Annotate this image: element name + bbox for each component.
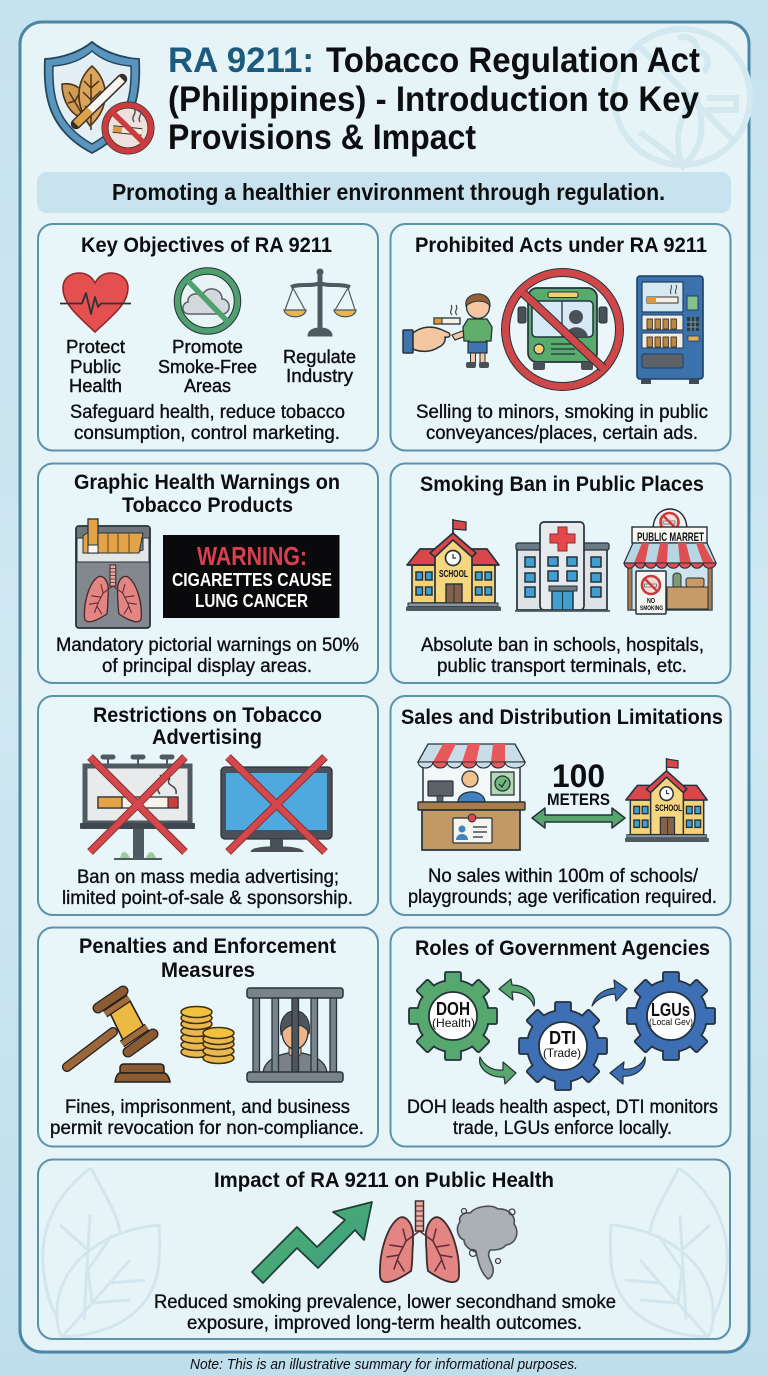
text: ban summary — [421, 635, 704, 677]
icon: smoke cloud — [457, 1206, 517, 1279]
heading: graphic warnings: Tobacco Products — [122, 493, 293, 517]
label: promote smoke-free areas: Smoke-Free — [158, 356, 257, 377]
label: regulate industry — [283, 346, 356, 386]
icon: school — [406, 519, 501, 611]
icon: hand offering cigarette to child — [403, 294, 492, 368]
text: objectives summary — [70, 402, 345, 444]
arrows: agency cycle — [480, 979, 645, 1084]
title — [168, 40, 700, 157]
text: advertising summary: limited point-of-sale & sponsorship. — [62, 888, 353, 909]
icon: public market: NO — [647, 598, 655, 605]
watermark: left leaves — [43, 1168, 160, 1337]
icon: prohibited bus — [506, 272, 620, 386]
text: prohibited summary: Selling to minors, smoking in public — [416, 402, 708, 423]
panel: prohibited acts — [390, 224, 730, 450]
watermark: header emblem — [614, 29, 750, 166]
panel: graphic warnings — [38, 464, 378, 683]
text: agencies summary: DOH leads health aspect, DTI monitors — [407, 1097, 718, 1118]
icon: heart with pulse — [60, 273, 131, 332]
text: advertising summary: Ban on mass media advertising; — [77, 867, 339, 888]
text: ban summary: Absolute ban in schools, hospitals, — [421, 635, 704, 656]
icon: LGUs gear: (Local Gev) — [649, 1017, 693, 1027]
title: Provisions & Impact — [168, 117, 476, 157]
heading: key objectives: Key Objectives of RA 9211 — [81, 233, 332, 257]
warning label: WARNING: — [197, 541, 307, 571]
panel: advertising restrictions — [38, 696, 378, 915]
text: warnings summary — [56, 635, 359, 677]
warning label — [163, 535, 340, 618]
icon: stacked coins — [181, 1006, 234, 1064]
icon: scales of justice — [284, 268, 356, 336]
subtitle banner: Promoting a healthier environment through regulation. — [112, 179, 665, 205]
subtitle banner — [37, 172, 731, 213]
label: promote smoke-free areas: Promote — [172, 336, 243, 357]
text: agencies summary — [407, 1097, 718, 1139]
panel: penalties — [38, 928, 378, 1146]
watermark: right leaves — [610, 1168, 727, 1337]
label: 100 meters — [547, 758, 610, 809]
heading: graphic warnings: Graphic Health Warnings on — [74, 470, 340, 494]
panel: government agencies — [390, 928, 730, 1146]
icon: LGUs gear: LGUs — [651, 1000, 690, 1020]
icon: gavel — [67, 991, 170, 1082]
heading: sales limitations: Sales and Distribution Limitations — [401, 705, 723, 729]
icon: DTI gear — [519, 1002, 607, 1090]
icon: no smoke cloud — [178, 271, 238, 331]
label: regulate industry: Industry — [286, 365, 354, 386]
icon: crossed billboard — [80, 757, 195, 859]
panel: smoking ban — [390, 464, 730, 683]
icon: LGUs gear — [627, 972, 715, 1060]
icon: public market: SMOKING — [640, 605, 663, 612]
icon: public market — [624, 509, 716, 614]
text: sales summary: playgrounds; age verification required. — [408, 887, 717, 908]
heading: penalties — [79, 934, 336, 982]
icon: DOH gear — [409, 972, 497, 1060]
heading: graphic warnings — [74, 470, 340, 517]
icon: rising arrow — [252, 1202, 372, 1283]
text: prohibited summary: conveyances/places, certain ads. — [426, 423, 698, 444]
icon: store counter with clerk — [418, 744, 525, 850]
heading: penalties: Penalties and Enforcement — [79, 934, 336, 958]
icon: school small — [625, 758, 709, 842]
title: (Philippines) - Introduction to Key — [168, 79, 699, 119]
heading: government agencies: Roles of Government Agencies — [415, 936, 710, 960]
label: regulate industry: Regulate — [283, 346, 356, 367]
icon: DOH gear: (Health) — [432, 1016, 475, 1030]
icon: DTI gear: (Trade) — [543, 1046, 581, 1060]
label: protect public health — [66, 336, 126, 396]
text: warnings summary: of principal display areas. — [102, 656, 312, 677]
heading: prohibited acts: Prohibited Acts under RA 9211 — [415, 233, 707, 257]
icon: public market: PUBLIC MARRET — [637, 530, 704, 544]
title: RA 9211: — [168, 40, 314, 80]
icon: school: SCHOOL — [439, 569, 468, 580]
label: promote smoke-free areas — [158, 336, 257, 396]
title: Tobacco Regulation Act — [326, 40, 700, 80]
warning label: LUNG CANCER — [195, 591, 308, 611]
label: protect public health: Protect — [66, 336, 126, 357]
text: warnings summary: Mandatory pictorial warnings on 50% — [56, 635, 359, 656]
label: promote smoke-free areas: Areas — [184, 375, 231, 396]
text: impact summary — [154, 1292, 616, 1334]
icon: hospital — [515, 522, 610, 611]
label: 100 meters: METERS — [547, 790, 610, 809]
heading: penalties: Measures — [161, 958, 255, 982]
text: penalties summary: Fines, imprisonment, and business — [65, 1097, 350, 1118]
heading: advertising restrictions — [93, 703, 322, 749]
text: sales summary — [408, 866, 717, 908]
footnote: Note: This is an illustrative summary for informational purposes. — [190, 1357, 578, 1373]
text: objectives summary: consumption, control marketing. — [74, 423, 340, 444]
icon: cigarette pack with lungs — [76, 519, 150, 628]
text: objectives summary: Safeguard health, reduce tobacco — [70, 402, 345, 423]
label: 100 meters: 100 — [552, 758, 605, 794]
icon: DTI gear: DTI — [549, 1028, 576, 1048]
arrow: distance — [532, 808, 625, 828]
icon: DOH gear: DOH — [436, 999, 470, 1019]
text: agencies summary: trade, LGUs enforce locally. — [453, 1118, 672, 1139]
text: penalties summary — [50, 1097, 364, 1139]
icon: vending machine — [637, 276, 703, 384]
heading: smoking ban: Smoking Ban in Public Places — [420, 472, 704, 496]
heading: advertising restrictions: Advertising — [152, 725, 262, 749]
icon: healthy lungs — [380, 1201, 459, 1282]
heading: impact: Impact of RA 9211 on Public Health — [214, 1168, 554, 1192]
text: ban summary: public transport terminals, etc. — [437, 656, 687, 677]
text: impact summary: exposure, improved long-term health outcomes. — [187, 1313, 582, 1334]
text: sales summary: No sales within 100m of schools/ — [428, 866, 699, 887]
text: advertising summary — [62, 867, 353, 909]
label: protect public health: Health — [69, 375, 122, 396]
label: protect public health: Public — [70, 356, 121, 377]
icon: person behind bars — [247, 988, 343, 1082]
panel: sales limitations — [390, 696, 730, 915]
icon: crossed television — [221, 757, 332, 852]
heading: advertising restrictions: Restrictions on Tobacco — [93, 703, 322, 727]
icon: shield with tobacco leaf and no-smoking sign — [45, 42, 151, 153]
text: penalties summary: permit revocation for non-compliance. — [50, 1118, 364, 1139]
text: prohibited summary — [416, 402, 708, 444]
text: impact summary: Reduced smoking prevalence, lower secondhand smoke — [154, 1292, 616, 1313]
warning label: CIGARETTES CAUSE — [172, 570, 332, 590]
panel: key objectives — [38, 224, 378, 450]
icon: school small: SCHOOL — [655, 803, 682, 813]
panel: impact — [38, 1160, 730, 1339]
